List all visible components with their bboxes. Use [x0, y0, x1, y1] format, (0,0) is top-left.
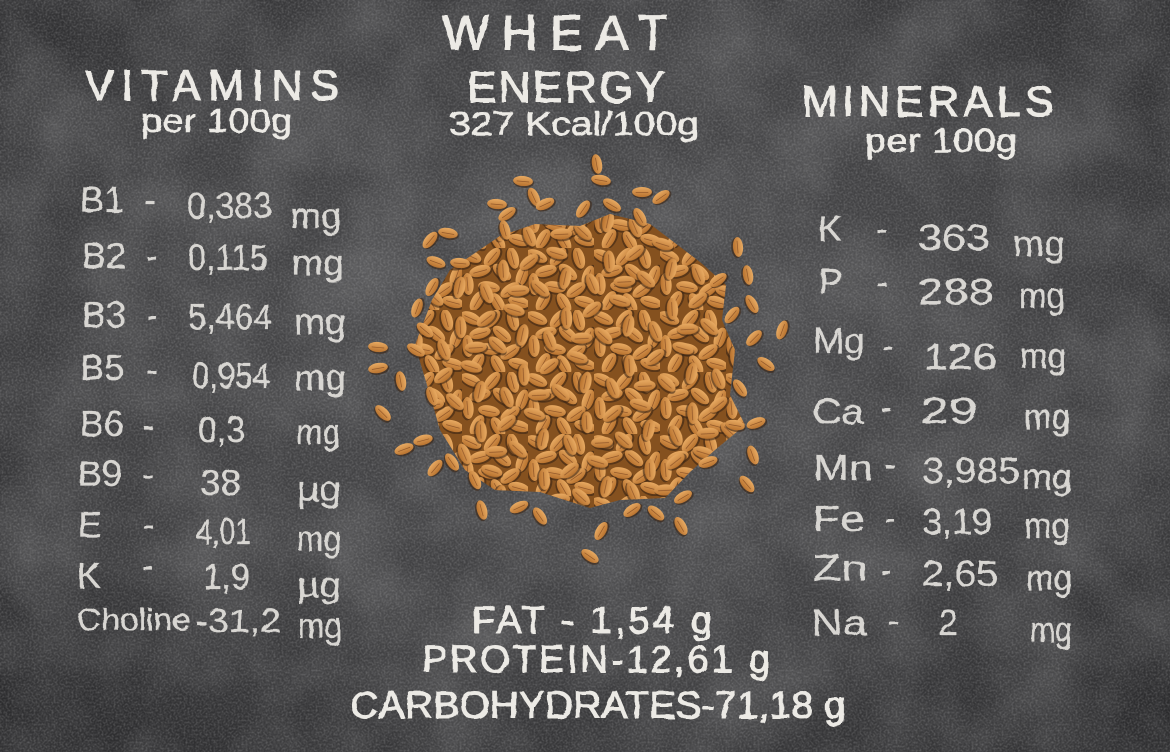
vitamins list: mg	[294, 357, 346, 398]
vitamins list: 38	[200, 462, 241, 503]
minerals list: P	[819, 261, 843, 302]
minerals list: -	[876, 208, 888, 249]
minerals list: Fe	[813, 498, 865, 539]
minerals list: mg	[1026, 557, 1072, 598]
loose grains around the pile	[367, 153, 792, 568]
vitamins list	[77, 179, 346, 646]
minerals list: Zn	[812, 547, 868, 588]
vitamins list: -	[144, 179, 156, 220]
minerals list: mg	[1022, 456, 1072, 497]
vitamins list: B2	[82, 235, 126, 276]
vitamins list: 4,01	[196, 511, 251, 552]
minerals list: mg	[1020, 335, 1066, 376]
minerals list: -	[882, 325, 894, 366]
vitamins list: E	[78, 504, 102, 545]
minerals list	[811, 208, 1072, 650]
vitamins list: mg	[296, 411, 340, 452]
minerals list: 126	[923, 336, 997, 377]
vitamins list: -	[146, 349, 158, 390]
minerals list: mg	[1030, 609, 1072, 650]
vitamins heading: per 100g	[141, 102, 292, 139]
minerals list: mg	[1013, 223, 1065, 264]
minerals list: K	[818, 208, 842, 249]
minerals list: 2,65	[922, 553, 998, 594]
vitamins list: mg	[298, 605, 342, 646]
vitamins list: -	[142, 545, 154, 586]
vitamins list: mg	[297, 518, 341, 559]
minerals list: 29	[920, 390, 978, 431]
macronutrients: CARBOHYDRATES-71,18 g	[350, 685, 846, 727]
vitamins list: K	[77, 555, 101, 596]
vitamins list: mg	[290, 195, 342, 236]
minerals list: mg	[1024, 396, 1070, 437]
minerals list: 288	[918, 271, 994, 312]
vitamins list: µg	[297, 468, 341, 509]
minerals list: -	[888, 600, 900, 641]
vitamins list: -	[146, 235, 158, 276]
minerals list: -	[880, 386, 892, 427]
wheat grain pile	[367, 153, 792, 568]
vitamins list: B9	[78, 453, 122, 494]
minerals list: Na	[811, 602, 868, 643]
vitamins list: 0,383	[187, 185, 272, 226]
vitamins list: -	[142, 503, 154, 544]
minerals heading: MINERALS	[802, 78, 1054, 126]
vitamins list: 0,954	[192, 355, 270, 396]
vitamins heading	[85, 62, 339, 139]
energy heading	[449, 63, 699, 142]
minerals list: Mg	[813, 320, 865, 361]
vitamins list: µg	[297, 564, 341, 605]
vitamins list: B6	[80, 403, 124, 444]
minerals list: Ca	[812, 391, 865, 432]
minerals list: 3,19	[922, 501, 992, 542]
minerals list: -	[884, 497, 896, 538]
macronutrients	[350, 600, 846, 727]
energy heading: ENERGY	[467, 63, 665, 112]
minerals list: -	[880, 549, 892, 590]
energy heading: 327 Kcal/100g	[449, 105, 699, 142]
minerals list: 3,985	[922, 450, 1020, 491]
vitamins heading: VITAMINS	[85, 62, 339, 110]
vitamins list: 0,3	[198, 409, 245, 450]
vitamins list: 0,115	[188, 237, 268, 278]
minerals list: -	[884, 443, 896, 484]
minerals list: -	[876, 261, 888, 302]
vitamins list: mg	[292, 242, 344, 283]
minerals list: mg	[1024, 505, 1070, 546]
vitamins list: mg	[294, 301, 346, 342]
minerals heading: per 100g	[865, 122, 1017, 159]
vitamins list: B5	[80, 347, 124, 388]
vitamins list: B1	[80, 179, 124, 220]
vitamins list: -	[142, 453, 154, 494]
minerals heading	[802, 78, 1054, 159]
minerals list: 363	[918, 217, 990, 258]
minerals list: mg	[1019, 275, 1065, 316]
vitamins list: -31,2	[195, 602, 281, 639]
vitamins list: 1,9	[203, 556, 250, 597]
minerals list: 2	[938, 602, 958, 643]
title: WHEAT	[442, 5, 668, 61]
vitamins list: 5,464	[188, 296, 272, 337]
vitamins list: -	[146, 294, 158, 335]
vitamins list: -	[143, 405, 155, 446]
vitamins list: B3	[82, 294, 126, 335]
macronutrients: FAT - 1,54 g	[472, 600, 712, 642]
macronutrients: PROTEIN-12,61 g	[422, 639, 770, 681]
minerals list: Mn	[813, 447, 873, 488]
vitamins list: Choline	[77, 602, 191, 637]
